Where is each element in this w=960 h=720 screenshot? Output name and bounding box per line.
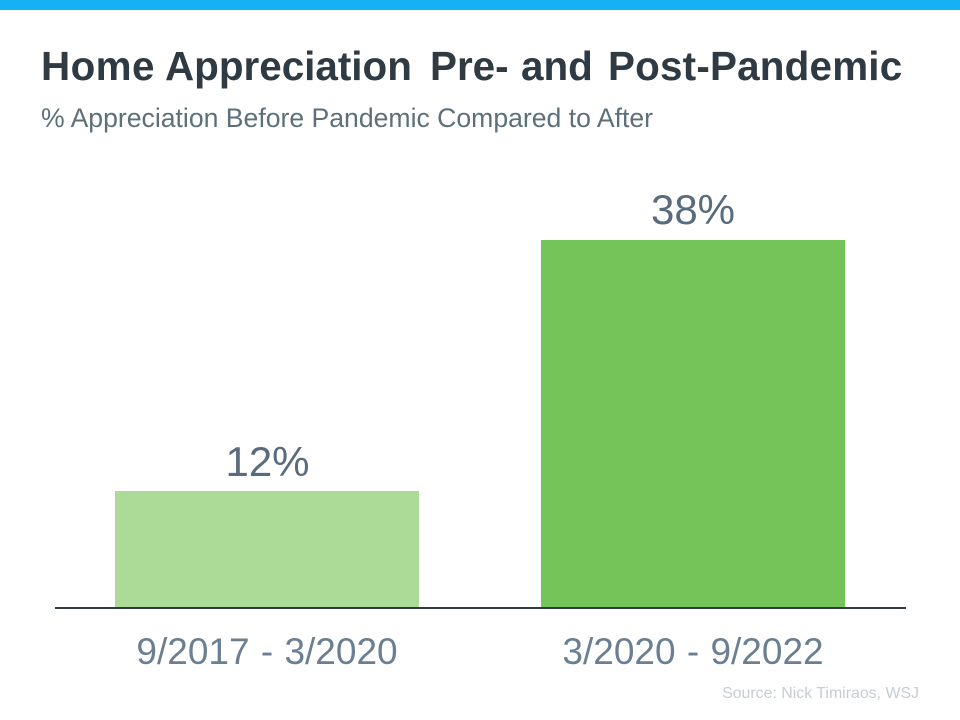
category label: 9/2017 - 3/2020: 9/2017 - 3/2020	[136, 631, 398, 672]
title	[41, 43, 902, 89]
bar chart	[55, 186, 906, 672]
value label: 12%: 12%	[225, 438, 310, 485]
source note: Source: Nick Timiraos, WSJ	[722, 685, 919, 702]
value label: 38%: 38%	[651, 186, 735, 233]
bar: 9/2017 - 3/2020	[115, 491, 419, 607]
title: and	[521, 43, 593, 89]
title: Pre-	[430, 43, 509, 89]
subtitle: % Appreciation Before Pandemic Compared to After	[41, 103, 653, 133]
title: Post-Pandemic	[608, 43, 902, 89]
category label: 3/2020 - 9/2022: 3/2020 - 9/2022	[562, 631, 824, 672]
title: Home	[41, 43, 155, 89]
top accent bar	[0, 0, 960, 10]
baseline axis	[55, 607, 906, 609]
title: Appreciation	[165, 43, 412, 89]
bar: 3/2020 - 9/2022	[541, 240, 845, 607]
